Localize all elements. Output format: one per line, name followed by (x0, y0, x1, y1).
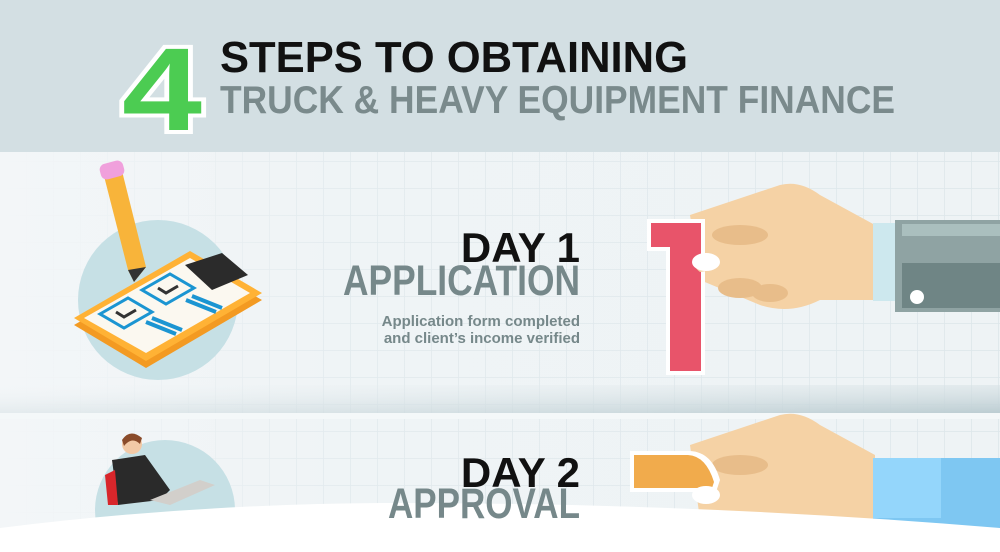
background (0, 152, 1000, 552)
day 1 text (343, 224, 580, 347)
big number 4: 4 (122, 24, 202, 156)
hand holding number 1 (647, 184, 1000, 375)
day 1 text: and client’s income verified (384, 330, 580, 347)
number 1 (647, 219, 705, 375)
hand holding number 2 (630, 414, 1000, 548)
icon: businessman at desk (95, 433, 235, 552)
bottom white wave (0, 503, 1000, 552)
day 2 text: APPROVAL (388, 480, 580, 528)
icon: clipboard with pencil (74, 159, 262, 380)
big number 4: 4 (122, 24, 202, 156)
day 1 text: Application form completed (382, 313, 580, 330)
day 2 text (388, 449, 580, 528)
day 2 text: DAY 2 (461, 449, 580, 496)
day 1 text: DAY 1 (461, 224, 580, 271)
header (0, 0, 1000, 156)
number 2 piece (630, 451, 720, 492)
title line 2: TRUCK & HEAVY EQUIPMENT FINANCE (220, 79, 895, 122)
day 1 text: APPLICATION (343, 257, 580, 305)
title line 1: STEPS TO OBTAINING (220, 33, 688, 82)
